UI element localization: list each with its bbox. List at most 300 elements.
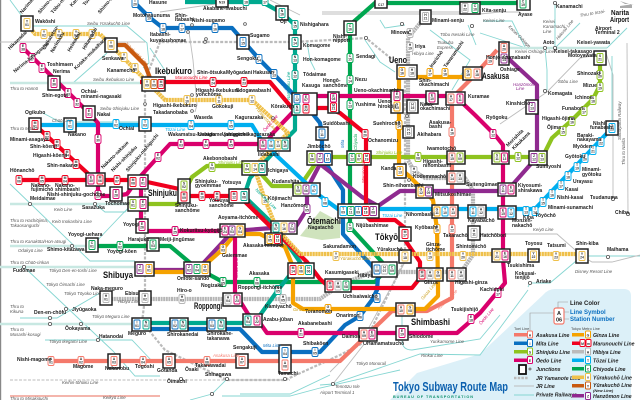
junction stations east: E: [396, 92, 398, 96]
junction stations central: G: [239, 226, 241, 230]
station name labels east: Kanamachi: [556, 4, 583, 10]
stations: small markers: 01: [49, 360, 53, 364]
station name labels west: Narimasu: [50, 31, 66, 54]
station name labels east: Tsukishima: [507, 263, 534, 269]
stations: small markers: N: [294, 71, 296, 75]
station name labels central: sanchōme: [175, 208, 200, 214]
junction stations central: 09: [260, 167, 264, 171]
junction stations east: 12: [532, 157, 536, 161]
stations: small markers: 02: [118, 246, 122, 250]
junction stations west: 02: [181, 324, 185, 328]
stations: small markers: 23: [242, 82, 246, 86]
line name italic captions: Line: [516, 86, 525, 91]
line: Ginza: [145, 77, 470, 309]
stations: small markers: Y: [186, 96, 188, 100]
big hub station names: Ueno: [389, 55, 407, 65]
stations: small markers: 10: [435, 228, 439, 232]
stations: small markers: 15: [541, 202, 545, 206]
station name labels west: Fudōmae: [13, 268, 35, 274]
junction stations central: M: [292, 266, 294, 270]
stations: small markers: 03: [57, 34, 61, 38]
junction stations central: Z: [231, 226, 233, 230]
junction stations central: 14: [253, 167, 257, 171]
line name italic captions: Hokusō Line: [555, 18, 575, 41]
big hub station names: Ikebukuro: [155, 66, 192, 76]
junction stations west: I: [285, 348, 286, 352]
junction stations central: 06: [299, 269, 303, 273]
stations: small markers: S: [417, 153, 419, 157]
junction stations east: E: [503, 154, 506, 158]
station name labels central: Nishi-sugamo: [192, 18, 225, 24]
stations: small markers: T: [592, 146, 594, 150]
stations: small markers: 02: [42, 34, 46, 38]
junction stations west: 22: [255, 320, 259, 324]
junction stations west: A: [113, 357, 115, 361]
stations: small markers: Y: [555, 252, 557, 256]
station name labels west: Jiyūgaoka: [72, 307, 97, 313]
junction stations central: 06: [307, 269, 310, 273]
junction stations central: 15: [328, 285, 332, 289]
junction stations west: T: [144, 120, 146, 124]
station name labels central: Nezu: [355, 77, 367, 83]
stations: small markers: G: [327, 305, 329, 309]
line: Asakusa: [50, 50, 497, 361]
line name italic captions: Namboku Line: [254, 187, 278, 211]
legend: tokyo metro lines: C: [587, 368, 590, 372]
legend: line symbol key: Line Color: [570, 301, 600, 307]
stations: small markers: 25: [173, 230, 177, 234]
line name italic captions: Seibu Yūrakuchō Line: [87, 21, 130, 26]
stations: small markers: 24: [211, 82, 215, 86]
station name labels west: Shimo-kitazawa: [47, 247, 85, 253]
station name labels east: Keisei-takasago: [554, 49, 592, 55]
stations: small markers: I: [182, 24, 183, 28]
station name labels west: Ochiai: [119, 126, 135, 132]
station name labels central: sanchōme: [209, 203, 234, 209]
junction stations central: 07: [318, 157, 322, 161]
station name labels east: Minowa: [391, 30, 410, 36]
junction stations central: 15: [241, 41, 245, 45]
stations: small markers: H: [282, 295, 284, 299]
junction stations west: Y: [26, 20, 28, 24]
junction stations west: E: [142, 200, 144, 204]
stations: small markers: 04: [74, 34, 78, 38]
station name labels west: Nerima: [53, 69, 70, 75]
line name italic captions: Airport Terminal 1: [319, 390, 355, 395]
stations: small markers: C: [349, 223, 351, 227]
junction stations central: E: [371, 330, 373, 334]
junction stations west: E: [53, 79, 55, 83]
junction stations central: 12: [232, 195, 236, 199]
station name labels east: nakachō: [512, 223, 532, 229]
stations: small markers: 08: [323, 202, 327, 206]
stations: small markers: 08: [133, 68, 137, 72]
junction stations central: A: [400, 306, 402, 310]
line name italic captions: Keiyō Line: [533, 227, 554, 232]
junction stations central: I: [243, 38, 244, 42]
station name labels west: Kokuritsu-kyōgijō: [180, 228, 223, 234]
station name labels east: Shin-kiba: [576, 241, 599, 247]
line name italic captions: Yūrakuchō Line: [254, 105, 278, 132]
junction stations central: 07: [357, 157, 361, 161]
stations: small markers: M: [75, 160, 77, 164]
station name labels central: Nagatachō: [308, 225, 334, 231]
junction stations central: 08: [242, 195, 246, 199]
junction stations east: 14: [502, 58, 506, 62]
junction stations west: E: [115, 190, 117, 194]
junction stations west: E: [256, 316, 258, 320]
junction stations central: I: [358, 207, 359, 211]
junction stations west: 03: [219, 324, 223, 328]
junction stations west: E: [141, 222, 143, 226]
junction stations west: E: [88, 109, 90, 113]
station name labels east: Myōden: [573, 144, 592, 150]
station name labels east: Mizue: [583, 83, 597, 89]
station name labels east: Kasai: [565, 187, 579, 193]
stations: small markers: 17: [559, 184, 563, 188]
station name labels central: kuyakushomae: [150, 38, 186, 44]
junction stations central: 18: [403, 256, 407, 260]
station name labels central: Nishigahara: [300, 22, 329, 28]
station name labels east: Kodemmachō: [413, 174, 446, 180]
station name labels west: Hikawadai: [82, 26, 99, 51]
stations: small markers: M: [212, 78, 214, 82]
station name labels west: Ebisu: [125, 291, 139, 297]
station name labels east: Maihama: [607, 247, 629, 253]
stations: small markers: 19: [488, 60, 492, 64]
junction stations west: 36: [52, 82, 56, 86]
line name italic captions: Ginza Line: [420, 281, 438, 301]
stations: small markers: 15: [263, 200, 267, 204]
junction stations central: M: [329, 282, 331, 286]
junction stations west: C: [196, 265, 198, 269]
stations: small markers: A: [489, 56, 491, 60]
junction stations east: 13: [458, 177, 462, 181]
junction stations west: 01: [138, 268, 142, 272]
junction stations east: H: [407, 128, 410, 132]
stations: small markers: 19: [598, 86, 602, 90]
junction stations east: T: [444, 208, 446, 212]
junction stations east: 21: [424, 16, 427, 20]
station name labels central: Komagome: [303, 43, 330, 49]
junction stations east: 23: [610, 127, 614, 131]
station name labels west: Heiwadai: [67, 31, 83, 53]
line name italic captions: Express: [437, 45, 454, 50]
stations: small markers: 20: [461, 256, 465, 260]
junction stations east: 18: [410, 71, 414, 75]
junction stations central: 12: [350, 157, 354, 161]
junction stations central: T: [313, 186, 315, 190]
junction stations east: 11: [435, 211, 439, 215]
station name labels central: Hasune: [149, 0, 167, 6]
station name labels east: okachimachi: [419, 82, 450, 88]
junction stations central: 05: [296, 189, 300, 193]
junction stations east: H: [459, 174, 461, 178]
stations: small markers: 03: [179, 144, 183, 148]
stations: small markers: G: [398, 121, 400, 125]
title: Tokyo Subway Route Map: [393, 379, 508, 394]
junction stations central: 06: [336, 285, 340, 289]
line name italic captions: Hibiya Line: [118, 299, 140, 304]
station name labels central: Akabanebashi: [298, 321, 333, 327]
station name labels central: Kudanshita: [272, 179, 299, 185]
junction stations east: Z: [533, 154, 535, 158]
stations: small markers: N: [294, 21, 296, 25]
junction stations east: 19: [521, 3, 525, 7]
station name labels central: Sakuradamon: [323, 244, 356, 250]
stations: small markers: Y: [91, 30, 93, 34]
stations: small markers: Y: [251, 96, 253, 100]
station name labels east: Terminal 2: [595, 30, 620, 36]
junction stations east: Y: [581, 252, 583, 256]
junction stations west: 04: [283, 352, 287, 356]
stations: small markers: M: [116, 176, 118, 180]
station name labels west: Nakano: [68, 132, 86, 138]
junction stations central: G: [300, 266, 302, 270]
junction stations west: A: [284, 361, 286, 365]
junction stations east: Z: [531, 103, 533, 107]
junction stations east: 13: [503, 157, 506, 161]
junction stations east: 13: [540, 157, 544, 161]
stations: small markers: 05: [221, 282, 225, 286]
stations: small markers: E: [174, 227, 176, 231]
junction stations east: A: [451, 154, 453, 158]
line name italic captions: Yūrakuchō Line: [340, 256, 371, 261]
stations: small markers: Y: [264, 196, 266, 200]
legend: tokyo metro lines: Tokyo Metro Line: [571, 327, 600, 331]
stations: small markers: 04: [189, 124, 193, 128]
legend: tokyo metro lines: Hibiya Line: [593, 350, 621, 356]
stations: small markers: 17: [180, 28, 184, 32]
junction stations central: 06: [269, 144, 273, 148]
station name labels east: shirakawa: [518, 188, 542, 194]
station name labels west: Meidaimae: [30, 196, 56, 202]
line name italic captions: Keiō Inokashira Line: [52, 219, 92, 224]
junction stations central: H: [383, 266, 386, 270]
line name italic captions: Keikyū Line: [103, 395, 126, 400]
junction stations central: 16: [280, 12, 284, 16]
junction stations east: H: [460, 270, 462, 274]
station name labels central: Hon-komagome: [303, 57, 341, 63]
stations: small markers: 05: [276, 290, 280, 294]
junction stations central: S: [246, 164, 248, 168]
stations: small markers: 04: [204, 144, 208, 148]
legend: tokyo metro lines: Yūrakuchō Line: [593, 383, 632, 389]
junction stations east: 18: [475, 73, 479, 77]
stations: small markers: 10: [348, 226, 352, 230]
junction stations central: 16: [348, 27, 352, 31]
stations: small markers: 32: [75, 102, 79, 106]
station name labels central: Toranomon: [305, 309, 332, 315]
line name italic captions: Kikuna: [10, 309, 24, 314]
station name labels east: Tsukijishijō: [451, 307, 478, 313]
line name italic captions: Hanzōmon: [513, 82, 535, 87]
station name labels east: Ryōgoku: [486, 115, 507, 121]
stations: small markers: 05: [229, 144, 233, 148]
line name italic captions: Marunouchi Line: [175, 75, 208, 80]
junction stations west: 08: [131, 181, 135, 185]
station name labels central: Suidōbashi: [323, 121, 351, 127]
station name labels central: Shibakōen: [303, 341, 328, 347]
junction stations east: 11: [501, 189, 505, 193]
stations: small markers: Y: [43, 30, 45, 34]
stations: small markers: S: [599, 83, 601, 87]
station name labels east: itchōme: [426, 247, 445, 253]
station name labels west: fujimichō: [31, 187, 53, 193]
junction stations central: 22: [304, 108, 308, 112]
big hub station names: [103, 10, 630, 327]
JR Yamanote line: [142, 38, 405, 380]
stations: small markers: 06: [358, 316, 362, 320]
junction stations east: H: [480, 208, 482, 212]
stations: small markers: T: [525, 207, 527, 211]
stations: small markers: M: [243, 78, 245, 82]
junction stations west: 06: [109, 44, 113, 48]
station name labels central: Uchisaiwaichō: [343, 294, 378, 300]
stations: small markers: E: [180, 140, 182, 144]
junction stations central: N: [296, 105, 298, 109]
line name italic captions: Tōkyū Meguro Line: [92, 314, 130, 319]
junction stations east: H: [411, 102, 414, 106]
junction stations west: [21, 16, 291, 373]
stations: small markers: E: [67, 89, 69, 93]
line name italic captions: Ōedo Line: [234, 257, 239, 278]
junction stations west: 03: [210, 324, 214, 328]
line name italic captions: Sōbu Line: [558, 79, 578, 84]
junction stations central: A: [363, 330, 365, 334]
legend: toei lines: Asakusa Line: [535, 333, 570, 339]
station name labels west: Toshimaen: [47, 62, 73, 68]
line name italic captions: Thru to Hannō: [10, 86, 39, 91]
station name labels west: Shirokanedai: [167, 332, 199, 338]
stations: small markers: Y: [218, 96, 220, 100]
line: Mita: [135, 3, 378, 352]
station name labels central: Ueno-: [378, 99, 392, 105]
stations: small markers: 14: [257, 58, 261, 62]
junction stations east: 09: [427, 191, 430, 195]
station name labels east: Kayabachō: [468, 218, 495, 224]
stations: small markers: 20: [583, 158, 587, 162]
big hub station names: Tōkyō: [375, 232, 398, 242]
stations: small markers: 05: [74, 164, 78, 168]
stations: small markers: C: [349, 76, 351, 80]
station name labels east: funabashi: [590, 125, 614, 131]
station name labels central: Waseda: [194, 115, 213, 121]
junction stations west: E: [90, 176, 92, 180]
junction stations west: I: [137, 320, 138, 324]
legend: tokyo metro lines: Tōzai Line: [593, 358, 618, 364]
junction stations central: N: [275, 224, 277, 228]
station name labels central: Onarimon: [336, 313, 360, 319]
junction stations west: 01: [25, 23, 29, 27]
stations: small markers: 07: [115, 180, 119, 184]
junction stations west: H: [105, 294, 107, 298]
stations: small markers: E: [97, 191, 99, 195]
station name labels central: Higashi-ikebukuro: [196, 88, 240, 94]
station name labels east: Kuramae: [468, 94, 490, 100]
stations: small markers: 03: [221, 248, 225, 252]
big hub station names: Shibuya: [103, 270, 134, 280]
station name labels east: Nishi-kasai: [557, 195, 584, 201]
junction stations west: Y: [146, 80, 148, 84]
junction stations east: 13: [451, 211, 455, 215]
station name labels east: Tatsumi: [547, 243, 566, 249]
station name labels east: Kachidoki: [480, 287, 505, 293]
junction stations central: 21: [332, 107, 335, 111]
stations: small markers: Y: [123, 53, 125, 57]
legend: tokyo metro lines: m: [587, 342, 590, 346]
station name labels east: Honjo-azumabashi: [486, 55, 531, 61]
stations: small markers: I: [149, 13, 150, 17]
junction stations east: H: [424, 13, 427, 17]
station name labels east: Naka-: [420, 102, 434, 108]
junction stations west: I: [175, 320, 176, 324]
station name labels central: Motohasunuma: [133, 13, 170, 19]
junction stations west: 04: [246, 320, 250, 324]
station name labels east: Akihabara: [417, 132, 441, 138]
junction stations central: 06: [310, 157, 314, 161]
junction stations east: Z: [427, 188, 430, 192]
station name labels west: Kamiyachō: [265, 304, 292, 310]
junction stations central: I: [297, 95, 298, 99]
station name labels east: Shintomichō: [456, 244, 486, 250]
station name labels central: Hamamatsuchō: [367, 341, 404, 347]
line name italic captions: Marunouchi: [361, 159, 366, 183]
stations: small markers: 16: [450, 132, 454, 136]
line name italic captions: Thru to Inzai-: [579, 8, 606, 18]
station name labels east: Chiba: [615, 210, 629, 216]
station name labels west: Nakanobu: [105, 366, 129, 372]
station name labels east: Asakusa-: [429, 120, 452, 126]
line name italic captions: Mita: [340, 139, 345, 148]
junction stations east: 10: [443, 211, 447, 215]
junction stations east: 10: [430, 97, 434, 101]
stations: small markers: A: [50, 357, 52, 361]
junction stations east: 19: [466, 73, 470, 77]
stations: small markers: 10: [200, 196, 204, 200]
stations: small markers: Y: [58, 30, 60, 34]
line name italic captions: Ōedo Line: [478, 306, 495, 326]
station name labels central: Itabashi: [175, 17, 195, 23]
big hub station names: Asakusa: [482, 71, 510, 81]
station name labels west: Naka-meguro: [91, 286, 123, 292]
junction stations central: 24: [223, 230, 227, 234]
junction stations central: 20: [370, 334, 374, 338]
stations: small markers: 08: [375, 298, 379, 302]
stations: small markers: Y: [75, 30, 77, 34]
junction stations east: 11: [450, 274, 454, 278]
stations: small markers: 02: [45, 136, 49, 140]
stations: small markers: M: [41, 176, 43, 180]
junction stations central: 13: [276, 238, 279, 242]
station name labels central: Kasuga: [302, 83, 320, 89]
station name labels central: Ochanomizu: [368, 138, 398, 144]
junction stations east: C17: [378, 3, 384, 7]
junction stations east: 10: [459, 274, 463, 278]
junction stations east: T: [472, 208, 474, 212]
stations: small markers: C: [349, 101, 351, 105]
station name labels central: Iidabashi: [258, 152, 280, 158]
junction stations central: I: [377, 266, 378, 270]
junction stations central: 08: [408, 309, 412, 313]
station name labels east: [383, 4, 629, 313]
junction stations central: 13: [276, 144, 280, 148]
junction stations west: 01: [141, 181, 145, 185]
stations: small markers: M: [64, 176, 66, 180]
station name labels west: Kanamechō: [107, 68, 135, 74]
station name labels west: Harajuku: [128, 237, 149, 243]
stations: small markers: T: [324, 198, 326, 202]
